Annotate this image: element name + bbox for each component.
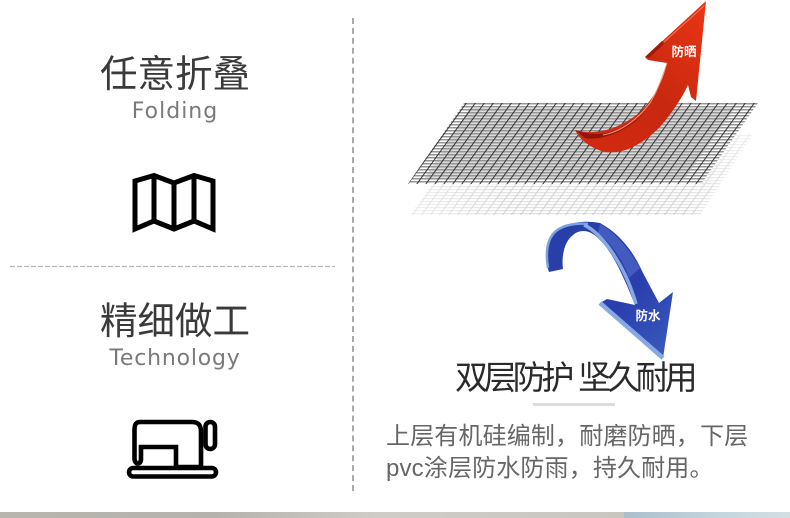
icon: sewing machine — [126, 420, 218, 479]
arrow: blue downward, waterproof — [546, 222, 673, 358]
arrow label: sun protection: 防晒 — [671, 44, 697, 59]
lower mesh layer — [410, 134, 753, 215]
body text: 上层有机硅编制，耐磨防晒，下层 — [386, 423, 748, 450]
arrow label: waterproof: 防水 — [635, 308, 661, 323]
bottom strip: photo edge left — [0, 512, 624, 518]
chinese title: folding: 任意折叠 — [100, 53, 250, 95]
english title: folding: Folding — [132, 99, 218, 124]
icon: folding screen — [132, 172, 216, 233]
main heading: 双层防护 坚久耐用 — [455, 359, 693, 396]
arrow: red upward, sun protection — [575, 1, 706, 152]
chart: double-layer fabric diagram — [408, 1, 758, 360]
heading underline — [533, 403, 615, 406]
body text — [386, 423, 748, 482]
heading: technology — [100, 300, 250, 371]
bottom strip: photo edge right — [624, 512, 790, 518]
body text: pvc涂层防水防雨，持久耐用。 — [386, 455, 714, 482]
heading: folding — [100, 53, 250, 124]
english title: technology: Technology — [109, 346, 241, 371]
divider: horizontal dashed — [10, 266, 335, 268]
upper mesh layer — [408, 103, 758, 184]
chinese title: technology: 精细做工 — [100, 300, 250, 342]
divider: vertical dashed — [352, 18, 354, 491]
